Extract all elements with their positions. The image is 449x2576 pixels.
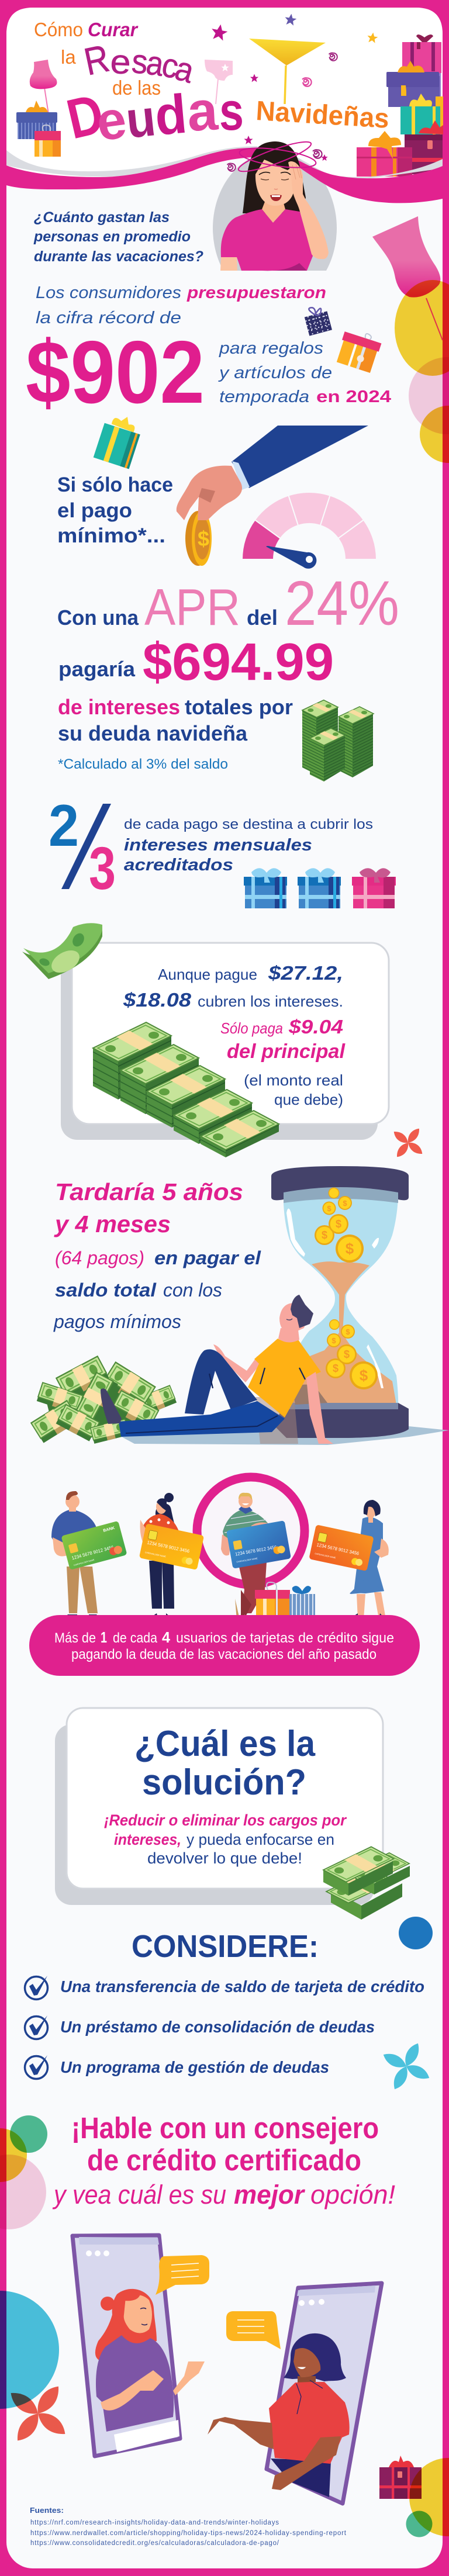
illustration: person 4 with red-orange card: CARDHOLDER NAME bbox=[315, 1552, 336, 1560]
illustration: hourglass with coins bbox=[271, 1166, 409, 1438]
decorative stars and spirals bbox=[210, 13, 378, 182]
fraction: 2/3: 2 bbox=[49, 793, 79, 859]
text: time to pay: con los bbox=[163, 1280, 222, 1301]
title: Cómo Curar la Resaca de las Deudas Navideñas: R bbox=[81, 36, 113, 84]
card text: payment: Sólo paga bbox=[220, 1019, 283, 1037]
icons: three gifts bbox=[244, 868, 396, 908]
text: minimum payment: Si sólo hace bbox=[57, 473, 173, 496]
call to action text: y vea cuál es su bbox=[52, 2180, 226, 2210]
title: Cómo Curar la Resaca de las Deudas Navideñas: u bbox=[123, 88, 158, 149]
text: minimum payment: el pago bbox=[57, 499, 132, 522]
text: time to pay: (64 pagos) bbox=[55, 1247, 144, 1268]
callout pill: 1 in 4 users: pagando la deuda de las vacaciones del año pasado bbox=[71, 1647, 377, 1662]
header white background bbox=[6, 8, 443, 182]
illustration: hourglass with coins: $ bbox=[343, 1199, 347, 1208]
illustration: person 3 with blue card bbox=[221, 1493, 291, 1626]
text: would pay $694.99: *Calculado al 3% del saldo bbox=[58, 756, 228, 772]
title: Cómo Curar la Resaca de las Deudas Navideñas: d bbox=[153, 83, 189, 147]
shadow under hourglass bbox=[120, 1426, 449, 1445]
icon: speech bubble 1 bbox=[156, 2255, 209, 2295]
call to action text: opción! bbox=[310, 2180, 395, 2210]
panel: solution card: ¡Reducir o eliminar los cargos por bbox=[104, 1811, 347, 1829]
text: APR 24%: 24% bbox=[285, 568, 399, 638]
decorative right bottom circles bbox=[406, 2458, 449, 2537]
icon: hand with coin: $ bbox=[198, 527, 209, 551]
icon: pink glass left bbox=[30, 60, 57, 114]
text: time to pay: Tardaría 5 años bbox=[55, 1178, 243, 1205]
text: would pay $694.99: totales por bbox=[185, 695, 293, 719]
illustration: person 1 with green card bbox=[51, 1491, 127, 1622]
list: option 2 bbox=[25, 2015, 375, 2039]
card text: payment: del principal bbox=[227, 1040, 346, 1063]
decorative left circles bbox=[0, 2115, 47, 2229]
illustration: person 2 with orange card bbox=[139, 1493, 204, 1625]
list: option 1 bbox=[25, 1976, 424, 1999]
grey circle behind woman bbox=[213, 153, 337, 271]
sources: https://www.nerdwallet.com/article/shopping/holiday-tips-news/2024-holiday-spending-report bbox=[30, 2530, 347, 2537]
illustration: person 1 with green card: BANK bbox=[103, 1526, 115, 1533]
callout pill: 1 in 4 users: 1 bbox=[101, 1628, 107, 1646]
callout pill: 1 in 4 users: de cada bbox=[113, 1630, 158, 1646]
text: would pay $694.99: $694.99 bbox=[143, 633, 334, 691]
text: two thirds: de cada pago se destina a cubrir los bbox=[124, 817, 373, 832]
gauge chart bbox=[242, 492, 377, 569]
text: time to pay bbox=[53, 1178, 261, 1332]
text: for gifts bbox=[218, 339, 391, 406]
sources: https://www.consolidatedcredit.org/es/calculadoras/calculadora-de-pago/ bbox=[30, 2540, 279, 2547]
callout pill: 1 in 4 users: Más de bbox=[54, 1630, 96, 1646]
panel: solution card bbox=[55, 1708, 383, 1905]
illustration: person 1 with green card: 1234 5678 9012 3456 bbox=[71, 1544, 115, 1561]
illustration: money pile bbox=[31, 1356, 177, 1444]
icon: speech bubble 2 bbox=[226, 2311, 281, 2349]
illustration: person 4 with red-orange card bbox=[309, 1500, 391, 1625]
callout pill: 1 in 4 users bbox=[29, 1615, 420, 1676]
text: consumers budgeted: la cifra récord de bbox=[36, 309, 181, 327]
icon: money stacks small bbox=[323, 1847, 410, 1920]
question text: ¿Cuánto gastan las bbox=[34, 209, 170, 226]
text: consumers budgeted: presupuestaron bbox=[186, 283, 326, 302]
big number: $902: $902 bbox=[26, 323, 205, 422]
heading: consider: CONSIDERE: bbox=[132, 1929, 319, 1964]
list: option 2: Un préstamo de consolidación de deudas bbox=[60, 2018, 375, 2036]
text: APR 24%: APR bbox=[144, 578, 240, 636]
text: for gifts: y artículos de bbox=[218, 364, 332, 382]
text: for gifts: temporada bbox=[219, 388, 309, 406]
text: for gifts: en 2024 bbox=[316, 388, 391, 406]
title: Cómo Curar la Resaca de las Deudas Navideñas: Cómo bbox=[34, 19, 83, 40]
title: Cómo Curar la Resaca de las Deudas Navideñas: Curar bbox=[88, 19, 139, 40]
text: consumers budgeted bbox=[36, 283, 326, 327]
card text: payment bbox=[123, 962, 346, 1108]
icon: banknote bbox=[22, 923, 102, 979]
illustration: hourglass with coins: $ bbox=[346, 1327, 350, 1336]
text: would pay $694.99: su deuda navideña bbox=[58, 721, 248, 745]
icon: orange gift bbox=[335, 327, 383, 374]
decorative blue circle bbox=[399, 1917, 433, 1949]
question text: durante las vacaciones? bbox=[34, 248, 203, 265]
text: APR 24% bbox=[57, 568, 399, 638]
fraction: 2/3 bbox=[49, 793, 116, 902]
title: Cómo Curar la Resaca de las Deudas Navideñas: a bbox=[144, 44, 167, 84]
callout pill: 1 in 4 users: 4 bbox=[162, 1628, 171, 1646]
illustration: phone with woman 1 bbox=[72, 2235, 205, 2456]
illustration: hourglass with coins: $ bbox=[322, 1229, 327, 1241]
text: time to pay: en pagar el bbox=[154, 1247, 261, 1268]
illustration: woman with headache bbox=[220, 137, 329, 271]
panel: solution card: intereses, bbox=[114, 1831, 181, 1848]
text: two thirds bbox=[124, 817, 373, 874]
title: Cómo Curar la Resaca de las Deudas Navideñas: s bbox=[130, 42, 149, 81]
decorative right circles and glass bbox=[372, 216, 449, 463]
text: would pay $694.99: pagaría bbox=[58, 657, 136, 681]
title: Cómo Curar la Resaca de las Deudas Navideñas: c bbox=[158, 46, 182, 86]
text: APR 24%: del bbox=[247, 606, 278, 630]
sources: Fuentes: bbox=[30, 2506, 64, 2515]
text: APR 24%: Con una bbox=[57, 606, 139, 630]
call to action text: ¡Hable con un consejero bbox=[71, 2111, 379, 2145]
illustration: person 1 with green card: CARDHOLDER NAME bbox=[74, 1559, 95, 1567]
card text: payment: $9.04 bbox=[288, 1016, 343, 1038]
sources: https://nrf.com/research-insights/holiday-data-and-trends/winter-holidays bbox=[30, 2519, 279, 2526]
title: Cómo Curar la Resaca de las Deudas Navideñas: Navideñas bbox=[255, 95, 390, 134]
icon: blue flower bbox=[372, 2032, 441, 2101]
icon: light pink glass bbox=[205, 60, 233, 104]
title: Cómo Curar la Resaca de las Deudas Navideñas: e bbox=[93, 89, 130, 153]
callout pill: 1 in 4 users: usuarios de tarjetas de crédito sigue bbox=[176, 1630, 394, 1646]
illustration: person 4 with red-orange card: 1234 5678 9012 3456 bbox=[316, 1542, 360, 1557]
illustration: hourglass with coins: $ bbox=[360, 1367, 368, 1384]
text: minimum payment bbox=[57, 473, 173, 547]
text: time to pay: y 4 meses bbox=[54, 1211, 171, 1237]
icon: hand with coin bbox=[177, 426, 368, 566]
illustration: person 3 with blue card: CARDHOLDER NAME bbox=[236, 1557, 258, 1563]
panel: solution card: solución? bbox=[142, 1762, 306, 1803]
card text: payment: cubren los intereses. bbox=[198, 993, 343, 1010]
list: option 3 bbox=[25, 2055, 329, 2079]
text: two thirds: acreditados bbox=[124, 856, 233, 874]
illustration: phone with woman 2 bbox=[208, 2283, 382, 2504]
card text: payment: (el monto real bbox=[244, 1071, 343, 1089]
panel: solution card: devolver lo que debe! bbox=[147, 1849, 302, 1867]
title: Cómo Curar la Resaca de las Deudas Navideñas: e bbox=[110, 43, 132, 81]
header wave bbox=[6, 146, 443, 203]
title: Cómo Curar la Resaca de las Deudas Navideñas: a bbox=[171, 49, 199, 91]
icon: martini glass yellow bbox=[249, 39, 326, 104]
icon: money staircase bbox=[93, 1022, 279, 1157]
text: would pay $694.99 bbox=[58, 633, 334, 772]
question text: personas en promedio bbox=[33, 229, 191, 245]
text: would pay $694.99: de intereses bbox=[58, 695, 180, 719]
title: Cómo Curar la Resaca de las Deudas Navideñas: la bbox=[61, 46, 76, 68]
text: time to pay: saldo total bbox=[55, 1280, 157, 1301]
icon: teal gift bbox=[94, 411, 144, 469]
illustration: hourglass with coins: $ bbox=[346, 1240, 354, 1257]
fraction: 2/3: 3 bbox=[89, 835, 116, 902]
question text bbox=[33, 209, 203, 265]
card text: payment: $27.12, bbox=[268, 962, 343, 984]
title: Cómo Curar la Resaca de las Deudas Navideñas: D bbox=[61, 82, 109, 151]
text: for gifts: para regalos bbox=[219, 339, 323, 358]
call to action text bbox=[52, 2111, 395, 2210]
panel: solution card: y pueda enfocarse en bbox=[186, 1831, 334, 1848]
panel: payment breakdown card bbox=[61, 943, 389, 1140]
list: option 3: Un programa de gestión de deudas bbox=[60, 2058, 329, 2076]
illustration: person 3 with blue card: 1234 5678 9012 3456 bbox=[235, 1544, 277, 1557]
card text: payment: que debe) bbox=[274, 1091, 343, 1108]
icon: money columns bbox=[302, 700, 374, 782]
card text: payment: Aunque pague bbox=[158, 966, 257, 983]
list: option 1: Una transferencia de saldo de tarjeta de crédito bbox=[60, 1977, 424, 1996]
icon: coral flower small bbox=[383, 1118, 433, 1168]
text: time to pay: pagos mínimos bbox=[53, 1311, 181, 1332]
call to action text: de crédito certificado bbox=[87, 2143, 361, 2177]
icon: maroon gift bbox=[379, 2456, 422, 2499]
icon: polka dot gift bbox=[302, 304, 332, 336]
illustration: hourglass with coins: $ bbox=[333, 1363, 339, 1374]
icon: gifts stack right bbox=[357, 34, 443, 177]
illustration: hourglass with coins: $ bbox=[336, 1218, 341, 1230]
text: two thirds: intereses mensuales bbox=[124, 836, 312, 855]
text: minimum payment: mínimo*... bbox=[57, 524, 165, 547]
title: Cómo Curar la Resaca de las Deudas Navideñas: a bbox=[186, 79, 220, 143]
illustration: ring highlight bbox=[197, 1477, 305, 1585]
sources bbox=[30, 2506, 347, 2547]
illustration: person 2 with orange card: CARDHOLDER NAME bbox=[145, 1551, 167, 1558]
decorative blue circle and coral flower bbox=[0, 2291, 85, 2461]
illustration: hourglass with coins: $ bbox=[331, 1336, 336, 1345]
card text: payment: $18.08 bbox=[123, 989, 192, 1011]
title: Cómo Curar la Resaca de las Deudas Navideñas: de las bbox=[112, 77, 161, 99]
illustration: person 2 with orange card: 1234 5678 9012 3456 bbox=[147, 1540, 190, 1554]
icon: gifts beside person bbox=[255, 1582, 315, 1615]
icon: gifts left bbox=[16, 101, 61, 157]
panel: solution card: ¿Cuál es la bbox=[134, 1724, 315, 1764]
title: Cómo Curar la Resaca de las Deudas Navideñas: s bbox=[219, 82, 244, 141]
illustration: man sitting bbox=[101, 1295, 333, 1444]
illustration: hourglass with coins: $ bbox=[327, 1204, 331, 1213]
illustration: hourglass with coins: $ bbox=[344, 1348, 350, 1360]
title: Cómo Curar la Resaca de las Deudas Navideñas bbox=[34, 19, 390, 153]
call to action text: mejor bbox=[234, 2180, 305, 2210]
text: consumers budgeted: Los consumidores bbox=[36, 283, 181, 302]
